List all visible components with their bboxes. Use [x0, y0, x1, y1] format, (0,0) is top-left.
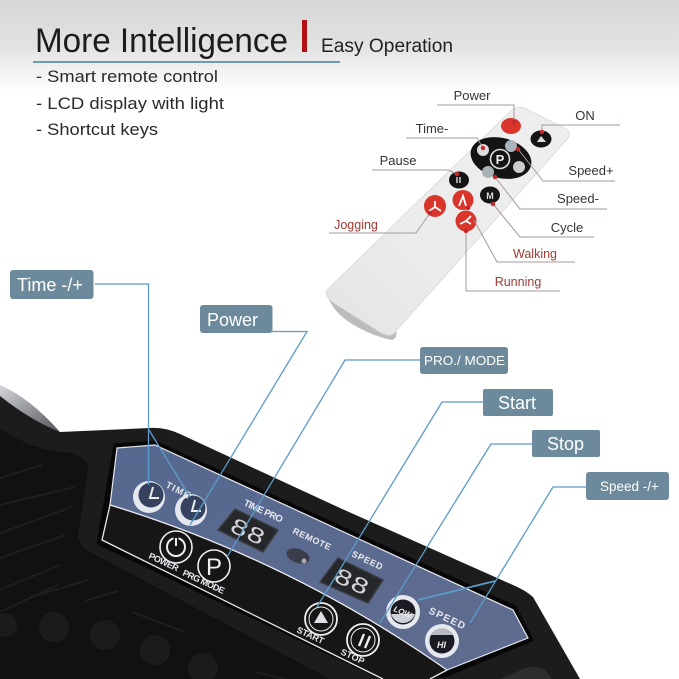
- label: time: [10, 270, 94, 299]
- control dial: [466, 131, 536, 185]
- power button: [147, 531, 192, 574]
- callout dots: [428, 120, 544, 233]
- feature list: - LCD display with light: [36, 94, 224, 113]
- control panel: [98, 442, 532, 679]
- on button: [530, 130, 552, 148]
- remote indicator: REMOTE: [291, 526, 333, 552]
- power button: [501, 118, 521, 134]
- speed low button: [386, 595, 420, 629]
- lcd speed display: SPEED: [350, 549, 385, 572]
- remote control: [326, 107, 570, 340]
- remote labels: Speed-: [557, 191, 599, 206]
- power button: POWER: [147, 551, 181, 574]
- lcd time display: 88: [225, 513, 269, 552]
- mode button: PRG MODE: [181, 568, 226, 596]
- speed high button: [425, 624, 459, 658]
- start button: [295, 603, 337, 646]
- platform bumps: [0, 612, 218, 679]
- walking button: [452, 190, 474, 210]
- label: pro mode: [420, 347, 508, 374]
- device callout lines: [95, 284, 586, 623]
- remote labels: [334, 88, 614, 289]
- label: start: [483, 389, 553, 416]
- jogging button: [424, 195, 446, 217]
- lcd time display: [218, 498, 284, 552]
- label: power: [200, 305, 272, 333]
- remote labels: Power: [454, 88, 491, 103]
- right corner detail: [500, 667, 552, 679]
- time buttons: TIME: [164, 480, 192, 501]
- label: time: Time -/+: [17, 275, 83, 295]
- remote labels: Cycle: [551, 220, 583, 235]
- running button: [456, 210, 476, 232]
- title: More Intelligence: [35, 22, 288, 60]
- remote callouts: [329, 105, 620, 291]
- label: power: Power: [207, 310, 258, 330]
- remote labels: Jogging: [334, 218, 378, 232]
- label: stop: [532, 430, 600, 457]
- vibration plate device: [0, 385, 580, 679]
- start button: START: [295, 625, 326, 646]
- title: [33, 20, 453, 63]
- speed high button: HI: [437, 640, 446, 650]
- remote labels: ON: [575, 108, 595, 123]
- feature list: - Shortcut keys: [36, 120, 158, 139]
- label: start: Start: [498, 393, 536, 413]
- top background gradient: [0, 0, 679, 92]
- mode button: P: [206, 554, 222, 581]
- title: Easy Operation: [321, 36, 453, 57]
- mode button: [181, 550, 230, 596]
- lcd time display: TIME PRO: [242, 498, 284, 525]
- platform ridges: [0, 465, 285, 679]
- label: pro mode: PRO./ MODE: [424, 353, 505, 368]
- remote indicator: [284, 526, 333, 567]
- stop button: STOP: [339, 647, 366, 666]
- remote labels: Running: [495, 275, 541, 289]
- cycle button: [480, 186, 500, 204]
- cycle button: M: [486, 191, 494, 201]
- remote labels: Time-: [416, 121, 448, 136]
- label: speed: Speed -/+: [600, 479, 659, 494]
- lcd speed display: 88: [329, 563, 373, 602]
- label: stop: Stop: [547, 434, 584, 454]
- feature list: - Smart remote control: [36, 67, 218, 86]
- time buttons: [133, 480, 207, 526]
- side platform surface: [0, 428, 330, 679]
- remote labels: Speed+: [568, 163, 614, 178]
- remote labels: Walking: [513, 247, 557, 261]
- stop button: [339, 624, 379, 666]
- label: speed: [586, 472, 669, 500]
- feature list: [36, 67, 224, 139]
- control dial: P: [496, 152, 505, 167]
- speed caption: SPEED: [427, 606, 467, 632]
- pause button: [449, 172, 469, 188]
- remote labels: Pause: [380, 153, 416, 168]
- speed low button: LOW: [392, 605, 414, 620]
- lcd speed display: [320, 549, 385, 603]
